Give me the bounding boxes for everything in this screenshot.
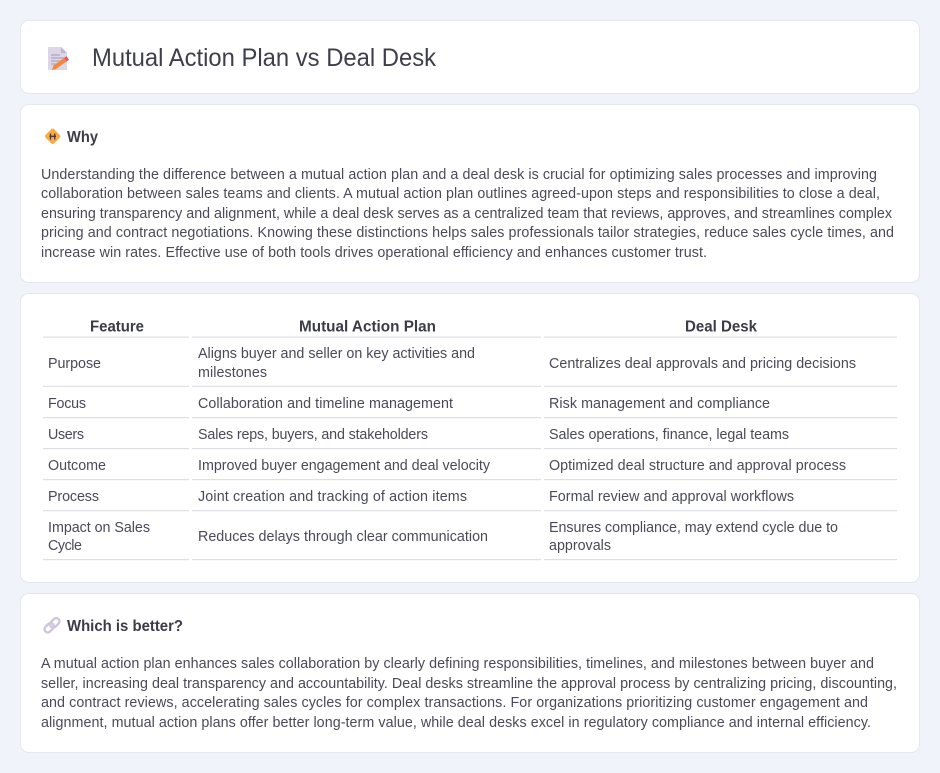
row: purpose: milestones bbox=[198, 365, 267, 381]
row: impact on sales cycle: Reduces delays through clear communication bbox=[198, 529, 488, 545]
text block: why explanation bbox=[41, 167, 894, 261]
row: users bbox=[48, 427, 789, 443]
text block: which is better explanation: and contract reviews, accelerating sales cycles for complex transactions. For organizations prioritizing customer engagement and bbox=[41, 695, 868, 711]
text block: which is better explanation: alignment, mutual action plans offer better long-term value, while deal desks excel in regulatory compliance and internal efficiency. bbox=[41, 715, 871, 731]
table header row: Deal Desk bbox=[685, 318, 757, 336]
title: Mutual Action Plan vs Deal Desk bbox=[92, 44, 436, 72]
panel: why bbox=[20, 104, 920, 282]
row: users: Sales operations, finance, legal teams bbox=[549, 427, 789, 443]
row: outcome: Improved buyer engagement and deal velocity bbox=[198, 458, 491, 474]
row: outcome: Optimized deal structure and approval process bbox=[549, 458, 846, 474]
row: impact on sales cycle: Cycle bbox=[48, 538, 82, 554]
text block: why explanation: ensuring transparency and alignment, while a deal desk serves as a centralized team that reviews, approves, and streamlines complex bbox=[41, 206, 892, 222]
row: focus: Risk management and compliance bbox=[549, 396, 770, 412]
table header row: Mutual Action Plan bbox=[299, 318, 436, 336]
icon: document with pencil bbox=[48, 47, 69, 70]
row: impact on sales cycle: Impact on Sales bbox=[48, 520, 150, 536]
row: process: Formal review and approval workflows bbox=[549, 489, 794, 505]
row: impact on sales cycle: approvals bbox=[549, 538, 611, 554]
text block: why explanation: increase win rates. Effective use of both tools drives operational efficiency and enhances customer trust. bbox=[41, 245, 707, 261]
row: purpose: Aligns buyer and seller on key activities and bbox=[198, 346, 475, 362]
row: purpose: Centralizes deal approvals and pricing decisions bbox=[549, 356, 856, 372]
row: focus bbox=[48, 396, 770, 412]
row: users: Sales reps, buyers, and stakeholders bbox=[198, 427, 428, 443]
table header row bbox=[90, 318, 757, 336]
text block: which is better explanation: seller, increasing deal transparency and accountability. Deal desks streamline the approval process by centralizing pricing, discounting, bbox=[41, 676, 897, 692]
row: outcome: Outcome bbox=[48, 458, 106, 474]
row: purpose bbox=[48, 346, 856, 381]
heading: why: Why bbox=[67, 129, 98, 146]
row: process: Process bbox=[48, 489, 99, 505]
row: impact on sales cycle bbox=[48, 520, 838, 554]
text block: why explanation: collaboration between sales teams and clients. A mutual action plan outlines agreed-upon steps and responsibilities to close a deal, bbox=[41, 186, 880, 202]
panel: comparison table bbox=[20, 294, 920, 582]
row: impact on sales cycle: Ensures compliance, may extend cycle due to bbox=[549, 520, 838, 536]
table header row: Feature bbox=[90, 318, 144, 336]
row: focus: Focus bbox=[48, 396, 86, 412]
icon: chain link bbox=[43, 617, 61, 634]
row: purpose: Purpose bbox=[48, 356, 101, 372]
row: focus: Collaboration and timeline management bbox=[198, 396, 453, 412]
icon: orange diamond sign bbox=[44, 128, 61, 145]
heading: which is better: Which is better? bbox=[67, 618, 183, 635]
panel: title header bbox=[20, 20, 920, 94]
text block: why explanation: pricing and contract negotiations. Knowing these distinctions helps sales professionals tailor strategies, reduce sales cycle times, and bbox=[41, 225, 894, 241]
text block: why explanation: Understanding the difference between a mutual action plan and a deal desk is crucial for optimizing sales processes and improving bbox=[41, 167, 877, 183]
row: outcome bbox=[48, 458, 846, 474]
text block: which is better explanation: A mutual action plan enhances sales collaboration by clearly defining responsibilities, timelines, and milestones between buyer and bbox=[41, 656, 874, 672]
row: users: Users bbox=[48, 427, 84, 443]
text block: which is better explanation bbox=[41, 656, 897, 731]
row: process: Joint creation and tracking of action items bbox=[198, 489, 467, 505]
row: process bbox=[48, 489, 794, 505]
panel: which is better bbox=[20, 594, 920, 752]
